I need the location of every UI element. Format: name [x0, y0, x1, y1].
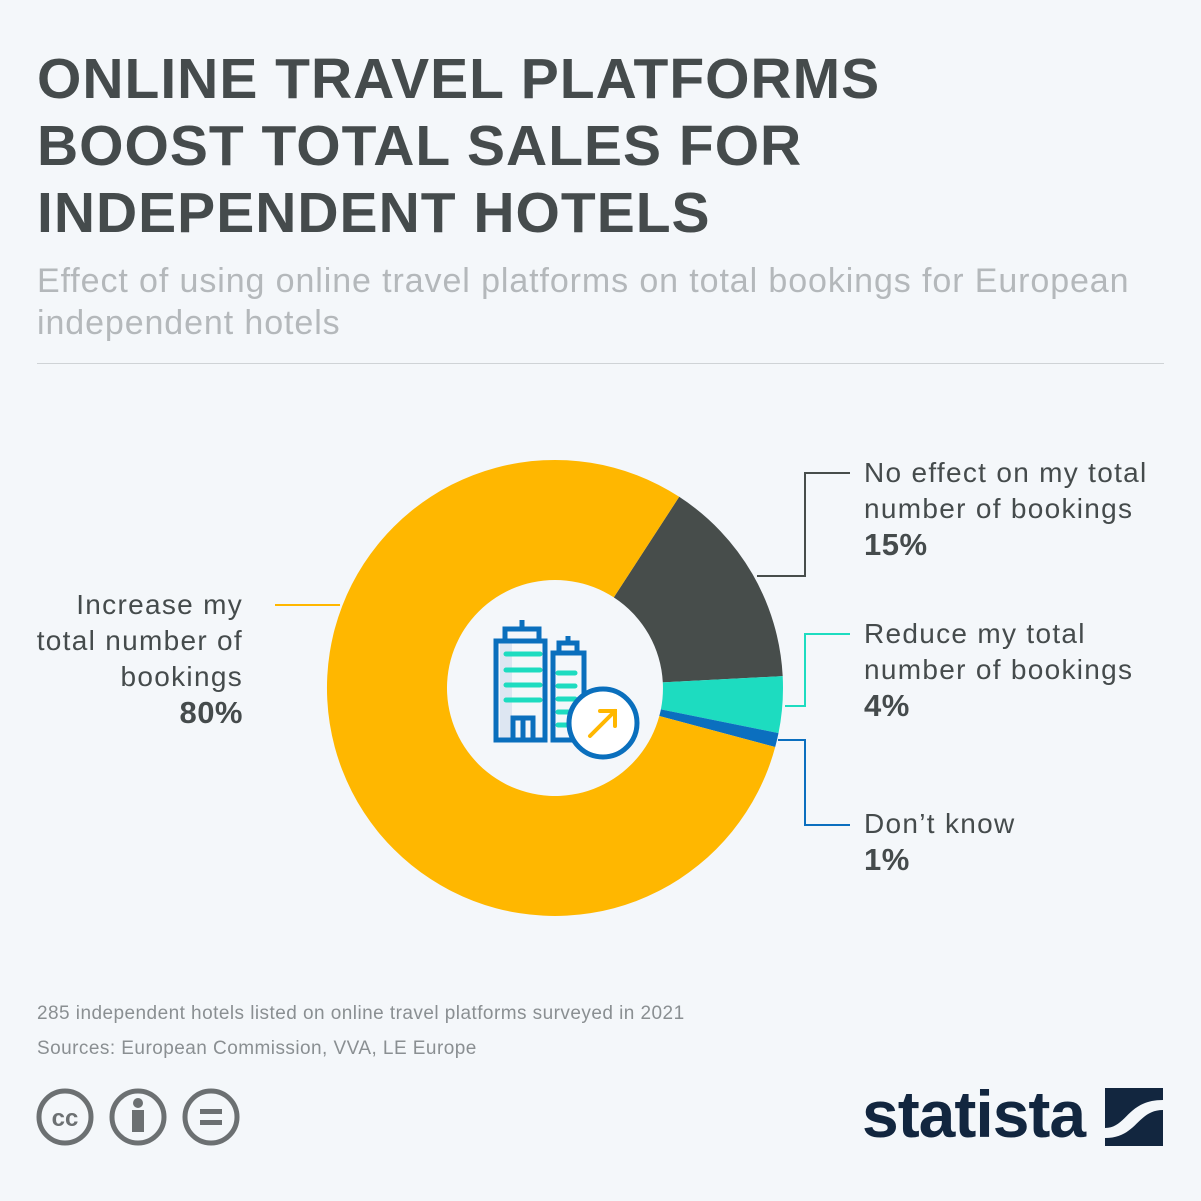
title: ONLINE TRAVEL PLATFORMS: [37, 47, 880, 111]
label: increase: 80%: [179, 695, 243, 730]
cc icons: [36, 1088, 240, 1146]
connector lines: [275, 473, 850, 825]
icon: hotel with growth arrow: [496, 620, 637, 757]
label: reduce: Reduce my total: [864, 618, 1086, 649]
title: [37, 47, 880, 245]
label: increase: total number of: [37, 625, 243, 656]
label: no effect: 15%: [864, 527, 928, 562]
label: no effect: No effect on my total: [864, 457, 1148, 488]
cc icons: cc: [52, 1105, 78, 1132]
label: don't know: Don’t know: [864, 808, 1016, 839]
sources: Sources: European Commission, VVA, LE Europe: [37, 1038, 477, 1059]
label: no effect: [864, 457, 1148, 562]
label: increase: bookings: [121, 661, 243, 692]
footnote: 285 independent hotels listed on online travel platforms surveyed in 2021: [37, 1003, 685, 1024]
label: no effect: number of bookings: [864, 493, 1133, 524]
label: increase: Increase my: [76, 589, 243, 620]
label: reduce: number of bookings: [864, 654, 1133, 685]
title: INDEPENDENT HOTELS: [37, 181, 711, 245]
statista logo: statista: [862, 1077, 1085, 1151]
subtitle: Effect of using online travel platforms on total bookings for European independent hotels: [37, 262, 1129, 342]
label: don't know: [864, 808, 1016, 877]
label: reduce: 4%: [864, 688, 910, 723]
title: BOOST TOTAL SALES FOR: [37, 114, 802, 178]
label: don't know: 1%: [864, 842, 910, 877]
label: reduce: [864, 618, 1133, 723]
label: increase: [37, 589, 243, 730]
